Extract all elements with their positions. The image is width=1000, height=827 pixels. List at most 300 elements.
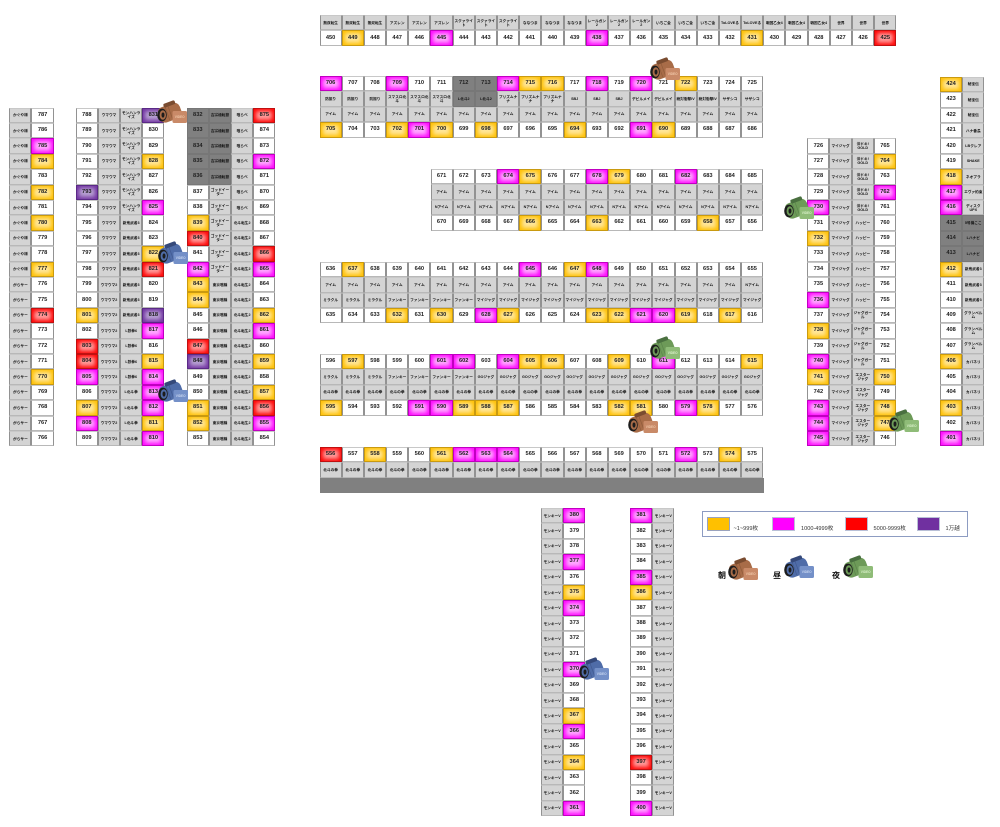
column: numbers 726-745: 741 <box>814 374 823 380</box>
row: numbers 670-656: 660 <box>659 219 668 225</box>
row: numbers 636-655: 638 <box>370 266 380 272</box>
row: names lower: アイム <box>347 112 358 116</box>
column: numbers 831-810: 831 <box>149 112 158 118</box>
column: numbers 726-745: 742 <box>814 389 823 395</box>
panel: left column 766-787 <box>9 108 54 446</box>
row: machine names: レールガン2 <box>632 19 650 27</box>
panel: far right column 401-424 <box>940 77 984 446</box>
column: numbers 832-853: 836 <box>193 173 203 179</box>
row: names lower <box>320 385 763 400</box>
column: numbers 726-745: 731 <box>814 220 823 226</box>
row: numbers 636-655: 636 <box>326 266 335 272</box>
legend icon: night camera: VIDEO <box>861 570 871 574</box>
column: names left: マイジャグ <box>831 206 850 210</box>
column: names: がらサー <box>13 360 28 364</box>
column: names: モンキーV <box>655 529 672 533</box>
column: names: がらサー <box>13 421 28 425</box>
column: names right: ジャグ <box>857 377 868 381</box>
column: numbers: 785 <box>38 143 47 149</box>
row: names lower: アイム <box>658 112 669 116</box>
row: numbers 595-576: 592 <box>392 404 402 410</box>
row: names lower: 北斗の拳 <box>434 390 449 394</box>
row: numbers 556-575: 564 <box>503 451 513 457</box>
column: names left: ゴッドイーター <box>211 204 229 212</box>
column: names: がらサー <box>13 283 28 287</box>
column: numbers 788-809: 790 <box>82 143 92 149</box>
row: numbers 670-656: 658 <box>703 219 713 225</box>
row: names upper: ミラクル <box>323 375 338 379</box>
row: numbers 556-575: 563 <box>481 451 491 457</box>
row: numbers 635-616: 618 <box>703 312 713 318</box>
row: machine names: 無双転生 <box>323 21 338 25</box>
column: names right: ハッピー <box>855 236 870 240</box>
column: numbers: 382 <box>636 528 646 534</box>
row: names lower: 北斗の拳 <box>412 390 427 394</box>
column: names: モンキーV <box>655 745 672 749</box>
column: names: 新鬼武者3 <box>965 267 982 271</box>
row: numbers 596-615: 614 <box>725 358 735 364</box>
row: numbers 706-725: 721 <box>659 80 668 86</box>
column: names right: 喰らべ <box>237 206 248 210</box>
row: names lower: ファンキー <box>388 298 406 302</box>
row: numbers 636-655: 641 <box>437 266 446 272</box>
column: numbers 788-809: 791 <box>82 158 92 164</box>
column: numbers 765-746: 765 <box>880 142 890 148</box>
column: names: かぐや様 <box>13 129 28 133</box>
row: names upper: アイム <box>392 283 403 287</box>
row: names lower: マイジャグ <box>699 298 717 302</box>
row: numbers 671-685: 678 <box>592 173 602 179</box>
column: numbers 832-853: 832 <box>193 112 203 118</box>
column: names right: 喰らべ <box>237 113 248 117</box>
row: numbers 706-725: 718 <box>592 80 602 86</box>
row: numbers 706-725: 708 <box>370 80 380 86</box>
row: names lower: 北斗の拳 <box>589 390 604 394</box>
row: numbers 706-725: 714 <box>503 80 513 86</box>
row: numbers 706-725: 725 <box>747 80 757 86</box>
column: numbers: 361 <box>570 805 579 811</box>
column: numbers 765-746: 762 <box>880 189 890 195</box>
column: numbers: 412 <box>946 266 956 272</box>
row: numbers 705-686: 688 <box>703 126 713 132</box>
column: numbers: 419 <box>946 158 956 164</box>
legend label: over 10000: 1万越 <box>946 526 960 532</box>
column: numbers 788-809: 789 <box>82 127 92 133</box>
column: numbers 832-853: 852 <box>193 420 203 426</box>
row: numbers 670-656: 665 <box>548 219 557 225</box>
row: names upper: SBJ <box>615 97 623 101</box>
column: names right: エスター <box>855 404 870 408</box>
column: names right: 喰らべ <box>237 190 248 194</box>
row: names upper: L北斗2 <box>458 97 470 101</box>
column: names: 5号機ここ <box>965 221 982 225</box>
column: numbers 726-745: 740 <box>814 358 823 364</box>
row: machine names: 世界 <box>882 21 889 25</box>
column: names right: ハッピー <box>855 298 870 302</box>
column: names right: 北斗転生2 <box>234 360 251 364</box>
column: names left: ウマウマ2 <box>101 360 117 364</box>
row: names upper: アイム <box>614 190 624 194</box>
row: names lower: アイム <box>525 112 536 116</box>
row: numbers 595-576: 593 <box>370 404 380 410</box>
column: names: モンキーV <box>543 591 561 595</box>
row: names upper: Nアイム <box>745 283 759 287</box>
column: names <box>9 108 31 446</box>
row: names upper: 絶対衝撃IV <box>699 97 717 101</box>
column: names left: 東京喰種 <box>213 437 227 441</box>
column: names left: マイジャグ <box>831 437 850 441</box>
column: names: 秘宝伝 <box>968 113 979 117</box>
row: machine numbers: 437 <box>614 35 624 41</box>
column: names: モンキーV <box>543 760 561 764</box>
column: names right: L北斗拳 <box>124 406 138 410</box>
column: names: かぐや様 <box>13 175 28 179</box>
row: names: 北斗の拳 <box>545 468 560 472</box>
row: names upper: アイム <box>614 283 624 287</box>
row: numbers 636-655: 649 <box>614 266 624 272</box>
panel: island 705-725 <box>320 76 763 138</box>
column: names: LBクレア <box>965 144 981 148</box>
icon: brown camera at 581 <box>628 412 658 433</box>
column: numbers 788-809: 799 <box>82 281 92 287</box>
column: numbers: 766 <box>38 435 47 441</box>
column: names: モンキーV <box>655 806 672 810</box>
row: names upper: アイム <box>592 190 602 194</box>
row: names upper: GOジャグ <box>655 375 672 379</box>
column: names <box>962 77 984 446</box>
row: machine numbers: 429 <box>792 35 801 41</box>
column: names: カバネリ <box>966 375 981 379</box>
column: numbers: 390 <box>636 651 646 657</box>
column: names: Lハナビ <box>967 236 980 240</box>
column: numbers: 392 <box>636 682 646 688</box>
row: names lower: Nアイム <box>612 205 626 209</box>
row: names lower: マイジャグ <box>543 298 562 302</box>
column: names left: ウマウマ2 <box>101 390 117 394</box>
row: names upper: ファンキー <box>410 375 429 379</box>
column: names: モンキーV <box>543 637 561 641</box>
column: numbers 765-746: 763 <box>880 173 890 179</box>
column: numbers 765-746: 758 <box>880 250 890 256</box>
row: names upper: アイム <box>525 283 536 287</box>
row: numbers 596-615: 596 <box>326 358 335 364</box>
column: names: モンキーV <box>655 683 672 687</box>
column: numbers 831-810: 822 <box>149 250 158 256</box>
row: numbers 556-575: 574 <box>725 451 735 457</box>
icon: brown camera at 721 <box>650 59 680 80</box>
row: numbers 705-686: 698 <box>481 126 491 132</box>
column: numbers 788-809: 798 <box>82 266 92 272</box>
column: names right: ジャグガール <box>854 311 872 319</box>
row: numbers 595-576: 577 <box>725 404 735 410</box>
panel: bottom column 361-380 <box>541 508 585 816</box>
column: numbers 875-854: 871 <box>260 173 269 179</box>
row: machine names: スクァライト <box>454 19 473 27</box>
row: numbers 671-685: 671 <box>437 173 446 179</box>
column: names right: エスター <box>855 388 870 392</box>
column: names left: 吉宗極転筒 <box>211 129 229 133</box>
column: numbers: 404 <box>946 389 956 395</box>
row: numbers 706-725: 717 <box>570 80 579 86</box>
column: numbers 875-854: 857 <box>260 389 269 395</box>
row: names upper: プリズムナナ <box>499 95 517 103</box>
column: names left: マイジャグ <box>831 313 850 317</box>
row: numbers 671-685: 677 <box>570 173 579 179</box>
row: names upper: L北斗2 <box>480 97 492 101</box>
column: numbers 726-745: 739 <box>814 343 823 349</box>
column: numbers 875-854 <box>253 108 275 446</box>
column: names left: 吉宗極転筒 <box>211 159 229 163</box>
row: names lower: マイジャグ <box>521 298 539 302</box>
row: numbers 635-616: 623 <box>592 312 602 318</box>
row: numbers 596-615: 611 <box>659 358 668 364</box>
column: names: モンキーV <box>655 637 672 641</box>
column: names right: 北斗転生2 <box>234 267 251 271</box>
column: names: かぐや様 <box>13 236 28 240</box>
column: names right: 喰らべ <box>237 159 248 163</box>
row: numbers 705-686: 690 <box>659 126 668 132</box>
column: numbers 875-854: 872 <box>260 158 269 164</box>
column: numbers 875-854: 873 <box>260 143 269 149</box>
row: numbers 635-616: 629 <box>459 312 468 318</box>
row: numbers 635-616: 627 <box>503 312 513 318</box>
row: machine names: ToLOVEる <box>743 21 761 25</box>
row: numbers 670-656: 657 <box>725 219 735 225</box>
column: names right: 北斗転生2 <box>234 221 251 225</box>
column: numbers: 786 <box>38 127 47 133</box>
row: names lower: マイジャグ <box>676 298 695 302</box>
column: names right: L鉄拳6 <box>125 329 137 333</box>
column: names: モンキーV <box>543 606 561 610</box>
column: numbers 832-853: 851 <box>193 404 203 410</box>
column: names: ディスク <box>966 204 981 208</box>
column: names <box>652 508 674 816</box>
row: numbers 636-655: 640 <box>415 266 424 272</box>
row: names lower: 北斗の拳 <box>700 390 715 394</box>
column: names right: ジャグ <box>857 423 868 427</box>
column: names: モンキーV <box>655 760 672 764</box>
row: names: 北斗の拳 <box>700 468 715 472</box>
row: numbers 596-615: 609 <box>614 358 624 364</box>
row: numbers 671-685: 675 <box>526 173 535 179</box>
column: numbers: 409 <box>946 312 956 318</box>
row: numbers 636-655: 642 <box>459 266 468 272</box>
row: names lower: 北斗の拳 <box>368 390 382 394</box>
column: names left: 東京喰種 <box>213 406 227 410</box>
row: names upper <box>431 184 763 200</box>
column: names: がらサー <box>13 375 28 379</box>
column: numbers: 368 <box>570 697 579 703</box>
row: numbers 671-685: 683 <box>703 173 713 179</box>
row: numbers 556-575: 575 <box>747 451 757 457</box>
row: names upper: GOジャグ <box>589 375 605 379</box>
row: numbers 635-616: 616 <box>747 312 757 318</box>
column: names left <box>209 108 231 446</box>
row: machine numbers: 439 <box>570 35 579 41</box>
column: numbers: 777 <box>38 266 47 272</box>
column: numbers 726-745: 743 <box>814 404 823 410</box>
column: numbers: 387 <box>636 605 646 611</box>
row: numbers 635-616: 620 <box>659 312 668 318</box>
row: numbers 705-686: 702 <box>392 126 402 132</box>
column: numbers 831-810: 823 <box>149 235 158 241</box>
row: names upper: ファンキー <box>388 375 406 379</box>
column: names left: マイジャグ <box>831 221 850 225</box>
row: numbers 706-725: 706 <box>326 80 335 86</box>
column: names left: 東京喰種 <box>213 298 227 302</box>
row: names lower: Nアイム <box>479 205 493 209</box>
column: names right: 沖ドキ! <box>857 173 869 177</box>
column: names: モンキーV <box>543 683 561 687</box>
row: numbers 636-655: 651 <box>659 266 668 272</box>
column: names left: ウマウマ <box>102 252 116 256</box>
row: names lower: 北斗の拳 <box>501 390 515 394</box>
row: names lower: Nアイム <box>568 205 581 209</box>
row: names upper: アイム <box>458 283 469 287</box>
column: numbers 832-853: 850 <box>193 389 203 395</box>
column: numbers 832-853: 838 <box>193 204 203 210</box>
row: numbers 635-616: 617 <box>725 312 735 318</box>
row: numbers 671-685: 682 <box>681 173 690 179</box>
row: machine names: スクァライト <box>477 19 495 27</box>
column: numbers: 781 <box>38 204 47 210</box>
row: names upper: アイム <box>636 283 647 287</box>
row: names lower: アイム <box>591 112 602 116</box>
row: names: 北斗の拳 <box>479 468 493 472</box>
row: names lower: Nアイム <box>657 205 670 209</box>
column: numbers 726-745: 726 <box>814 142 823 148</box>
column: numbers: 423 <box>946 96 956 102</box>
row: numbers 636-655: 653 <box>703 266 713 272</box>
row: names lower: アイム <box>325 112 336 116</box>
row: names lower: 北斗の拳 <box>567 390 582 394</box>
column: names left: 東京喰種 <box>213 313 227 317</box>
row: machine names: レールガン2 <box>588 19 606 27</box>
row: numbers 706-725: 719 <box>614 80 624 86</box>
icon: brown camera at 831 <box>157 102 187 123</box>
row: names upper: アイム <box>481 190 491 194</box>
column: names: グランベルム <box>964 342 982 350</box>
row: names: 北斗の拳 <box>678 468 693 472</box>
column: names right: ハッピー <box>855 221 870 225</box>
row: numbers 670-656: 656 <box>747 219 757 225</box>
column: names right: 沖ドキ! <box>857 188 869 192</box>
column: names right: 北斗転生2 <box>234 236 251 240</box>
column: numbers 831-810: 816 <box>149 343 158 349</box>
column: numbers: 415 <box>946 220 956 226</box>
column: numbers: 373 <box>570 620 579 626</box>
icon: green camera at 747: VIDEO <box>907 424 917 428</box>
column: numbers 832-853: 847 <box>193 343 203 349</box>
column: numbers 831-810: 820 <box>149 281 158 287</box>
row: names lower: アイム <box>392 112 403 116</box>
legend icon: morning camera: VIDEO <box>746 572 756 576</box>
column: names: SHAKE <box>967 159 980 163</box>
column: names right: 新鬼武者3 <box>123 298 140 302</box>
column: numbers 831-810: 821 <box>149 266 158 272</box>
row: names lower: 北斗の拳 <box>523 390 538 394</box>
column: numbers: 778 <box>38 250 47 256</box>
column: names: モンキーV <box>655 729 672 733</box>
row: names: 北斗の拳 <box>567 468 582 472</box>
column: names: かぐや様 <box>13 113 28 117</box>
column: names right: L北斗拳 <box>124 437 138 441</box>
row: numbers 706-725: 707 <box>348 80 358 86</box>
row: names lower: マイジャグ <box>477 298 495 302</box>
column: numbers 788-809: 803 <box>82 343 92 349</box>
row: names lower: アイム <box>480 112 491 116</box>
row: numbers 706-725: 716 <box>548 80 557 86</box>
column: numbers 788-809 <box>76 108 98 446</box>
row: machine names: アズレン <box>390 21 405 25</box>
column: names left: ウマウマ2 <box>101 313 117 317</box>
row: numbers 670-656: 667 <box>503 219 513 225</box>
row: machine numbers: 445 <box>437 35 446 41</box>
column: names: ハナ番長 <box>966 129 981 133</box>
row: names upper: GOジャグ <box>744 375 760 379</box>
icon: blue camera at 822 <box>158 243 188 264</box>
row: names lower: マイジャグ <box>632 298 650 302</box>
row: numbers 595-576: 587 <box>503 404 513 410</box>
column: numbers <box>563 508 585 816</box>
legend swatch: 5000-9999 <box>845 517 868 531</box>
column: numbers: 389 <box>636 635 646 641</box>
column: names right: 新鬼武者3 <box>123 252 140 256</box>
column: numbers 832-853: 834 <box>193 143 203 149</box>
column: names right: 喰らべ <box>237 144 248 148</box>
column: numbers: 388 <box>636 620 646 626</box>
column: numbers: 769 <box>38 389 47 395</box>
column: names: かぐや様 <box>13 206 28 210</box>
row: names lower: 北斗の拳 <box>323 390 338 394</box>
row: machine numbers: 433 <box>703 35 713 41</box>
column: numbers: 371 <box>570 651 579 657</box>
column: names right: 北斗転生2 <box>234 421 251 425</box>
column: names left: 東京喰種 <box>213 390 227 394</box>
row: numbers 670-656: 661 <box>637 219 646 225</box>
row: names lower: ミラクル <box>368 298 382 302</box>
row: machine numbers: 436 <box>636 35 646 41</box>
row: machine numbers: 449 <box>348 35 358 41</box>
column: numbers 765-746: 760 <box>880 220 890 226</box>
row: names upper: GOジャグ <box>500 375 516 379</box>
row: numbers 635-616: 624 <box>570 312 579 318</box>
column: numbers 832-853: 849 <box>193 374 203 380</box>
row: numbers 706-725: 710 <box>415 80 424 86</box>
row: names lower: アイム <box>370 112 380 116</box>
column: numbers: 414 <box>946 235 956 241</box>
row: numbers 595-576: 589 <box>459 404 468 410</box>
row: names upper: アイム <box>480 283 491 287</box>
column: names: モンキーV <box>655 714 672 718</box>
row: names lower: ファンキー <box>410 298 429 302</box>
row: numbers 596-615: 597 <box>348 358 358 364</box>
row: numbers 556-575: 566 <box>548 451 557 457</box>
column: names right: GOLD <box>857 146 868 150</box>
row: numbers 671-685: 679 <box>614 173 624 179</box>
row: names upper: サザシコ <box>745 97 760 101</box>
column: names: UPX <box>969 208 977 212</box>
column: names right: L北斗拳 <box>124 421 138 425</box>
row: names upper: アイム <box>503 190 514 194</box>
row: numbers 670-656: 670 <box>437 219 446 225</box>
column: numbers 875-854: 859 <box>260 358 269 364</box>
column: numbers 788-809: 792 <box>82 173 92 179</box>
row: numbers 596-615: 599 <box>392 358 402 364</box>
column: numbers 832-853: 841 <box>193 250 203 256</box>
column: names: がらサー <box>13 344 28 348</box>
row: machine numbers: 448 <box>370 35 380 41</box>
